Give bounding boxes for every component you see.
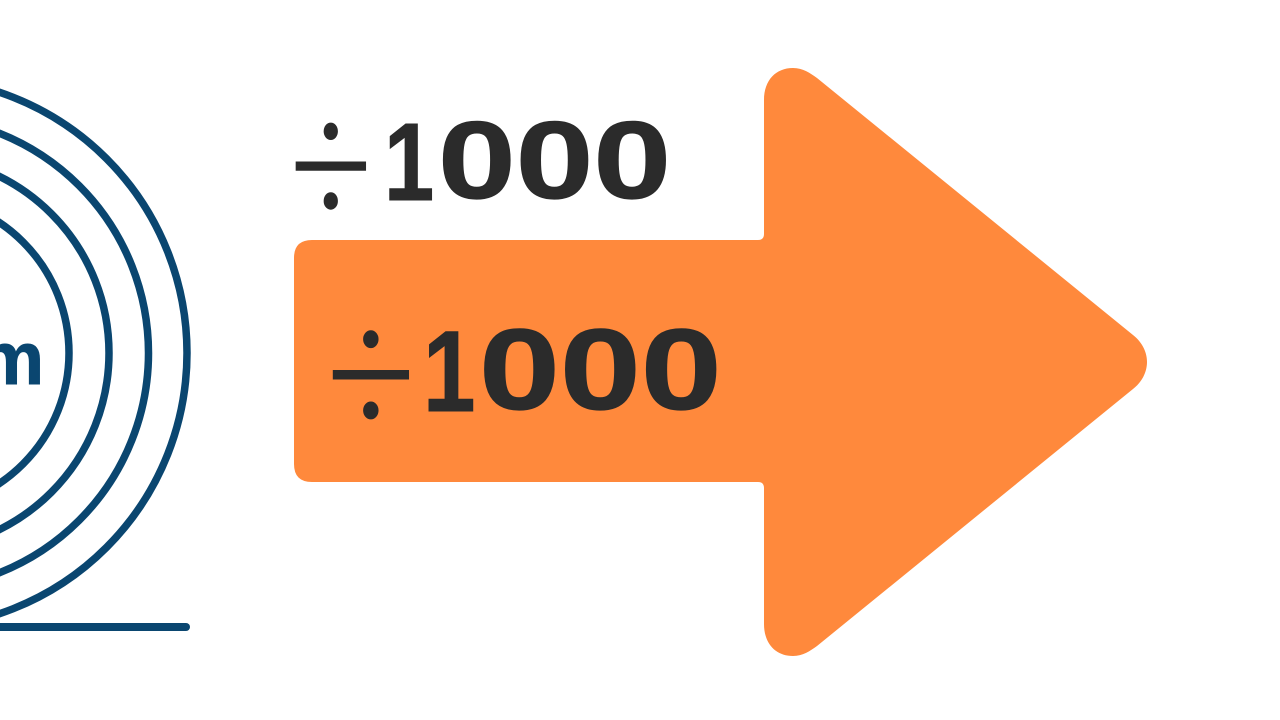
upper label: divide by 1000: 000 [438, 98, 671, 222]
upper label: divide by 1000: ÷ [289, 62, 372, 269]
upper label: divide by 1000: 1 [384, 102, 434, 224]
concentric rings icon with baseline [0, 78, 187, 628]
upper label: divide by 1000 [289, 62, 671, 269]
arrow label: divide by 1000 [326, 270, 722, 480]
orange arrow with label [294, 68, 1147, 656]
arrow label: divide by 1000: ÷ [326, 270, 416, 480]
arrow label: divide by 1000: 1 [423, 308, 475, 436]
arrow label: divide by 1000: 000 [479, 305, 722, 434]
